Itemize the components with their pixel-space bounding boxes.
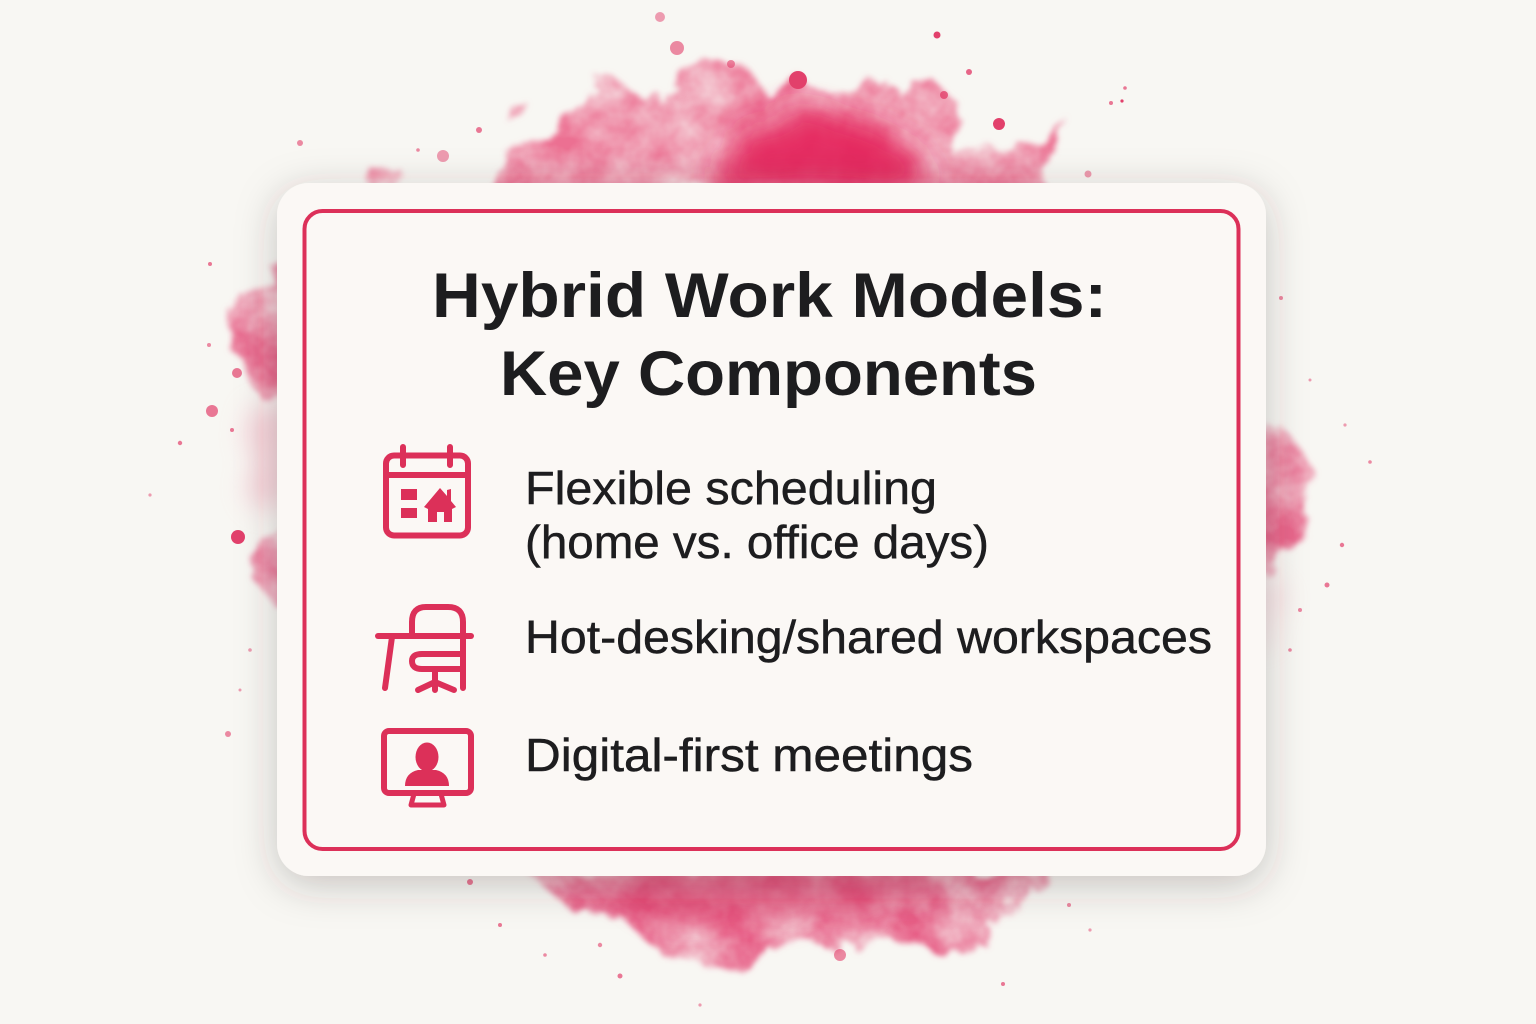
title: Hybrid Work Models: [432, 261, 1107, 331]
icon: desk and chair [378, 607, 471, 690]
text: flexible scheduling: Flexible scheduling [525, 462, 937, 514]
title [432, 261, 1107, 409]
watercolor splash: top [368, 60, 1072, 195]
watercolor splash: left [226, 265, 290, 607]
text: digital-first meetings: Digital-first meetings [525, 729, 973, 781]
watercolor splash: bottom [525, 870, 1055, 975]
title: Key Components [500, 339, 1037, 409]
text: flexible scheduling: (home vs. office days) [525, 516, 989, 568]
card border [304, 211, 1238, 849]
card panel [277, 183, 1266, 876]
item: digital-first meetings [384, 729, 973, 805]
icon: monitor with person [384, 731, 471, 805]
paint speckles [148, 12, 1372, 1007]
item: flexible scheduling [386, 447, 989, 568]
text: flexible scheduling [525, 462, 989, 568]
card background [277, 183, 1266, 876]
item: hot-desking [378, 607, 1212, 690]
icon: calendar with house [386, 447, 468, 536]
watercolor splash: right [1255, 430, 1315, 650]
text: hot-desking: Hot-desking/shared workspaces [525, 611, 1212, 663]
